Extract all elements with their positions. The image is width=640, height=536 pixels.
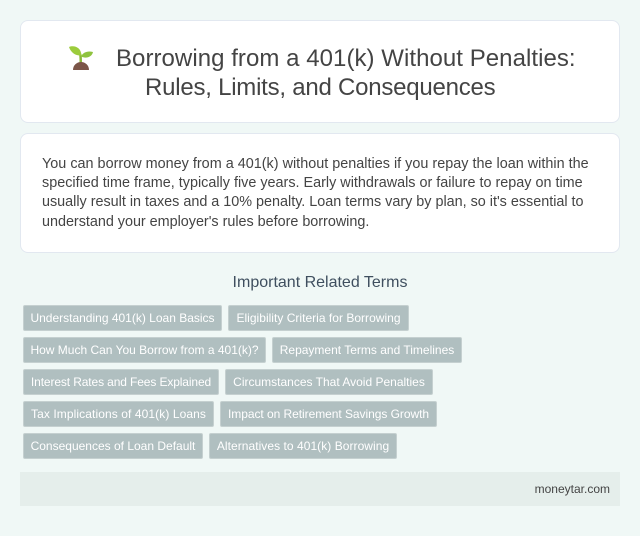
tag: Circumstances That Avoid Penalties — [233, 375, 425, 389]
tag: Understanding 401(k) Loan Basics — [30, 311, 215, 325]
panel: title card — [20, 20, 620, 123]
paragraph line 2: specified time frame, typically five years. Early withdrawals or failure to repay on time — [42, 175, 583, 191]
tag — [228, 305, 409, 331]
tag: Impact on Retirement Savings Growth — [228, 407, 429, 421]
tag — [220, 401, 437, 427]
heading: important related terms: Important Related Terms — [233, 274, 407, 291]
tag: Eligibility Criteria for Borrowing — [236, 311, 401, 325]
paragraph line 3: usually result in taxes and a 10% penalty. Loan terms vary by plan, so it's essential to — [42, 194, 584, 210]
tag: How Much Can You Borrow from a 401(k)? — [30, 343, 259, 357]
tag — [209, 433, 397, 459]
paragraph line 4: understand your employer's rules before borrowing. — [42, 214, 369, 230]
tag: Tax Implications of 401(k) Loans — [31, 407, 206, 421]
tag — [272, 337, 462, 363]
tag — [225, 369, 433, 395]
paragraph line 1: You can borrow money from a 401(k) without penalties if you repay the loan within the — [42, 156, 589, 172]
tag: Consequences of Loan Default — [31, 439, 195, 453]
tag: Repayment Terms and Timelines — [280, 343, 454, 357]
panel: summary paragraph — [20, 133, 620, 253]
tag — [23, 433, 203, 459]
footer bar — [20, 472, 620, 506]
tag: Interest Rates and Fees Explained — [31, 375, 211, 389]
tag — [23, 337, 266, 363]
tag — [23, 305, 222, 331]
icon: seedling — [69, 46, 93, 70]
tag — [23, 369, 219, 395]
tag: Alternatives to 401(k) Borrowing — [217, 439, 389, 453]
footer source text: moneytar.com — [535, 482, 610, 496]
title line 2: Rules, Limits, and Consequences — [145, 74, 495, 101]
tag list — [23, 305, 462, 459]
title line 1: Borrowing from a 401(k) Without Penalties: — [116, 45, 576, 72]
tag — [23, 401, 214, 427]
